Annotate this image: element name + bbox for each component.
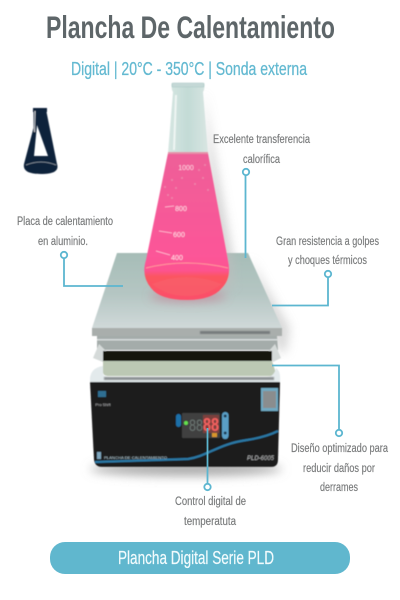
- hot plate product: Pro Shift: [95, 402, 112, 407]
- hot plate product: [90, 253, 290, 476]
- callout: control digital: Control digital de: [175, 496, 246, 508]
- callout: placa de calentamiento: Placa de calentamiento: [17, 216, 113, 228]
- hot plate product: PLANCHA DE CALENTAMIENTO: [104, 456, 167, 460]
- footer banner: [50, 542, 350, 574]
- liquid: [144, 153, 229, 300]
- plate front edge: [92, 328, 282, 336]
- QR code: [261, 388, 278, 411]
- model: PLD-6005: [247, 456, 275, 462]
- dark gap: [103, 351, 272, 361]
- case label: [97, 452, 101, 459]
- shadow: [90, 462, 282, 476]
- blue wave: [95, 431, 278, 462]
- callout: transferencia calorífica: Excelente transferencia: [213, 134, 310, 146]
- black case: [90, 382, 280, 467]
- callout: resistencia a golpes: y choques térmicos: [288, 255, 367, 267]
- callout: placa de calentamiento: en aluminio.: [38, 236, 88, 248]
- flask glass: [168, 83, 208, 153]
- callout: diseño optimizado: [272, 366, 388, 494]
- callout: diseño optimizado: derrames: [320, 482, 358, 494]
- callout: transferencia calorífica: [213, 134, 310, 258]
- plate side shadow: [250, 258, 290, 352]
- plate lower layer: [97, 336, 278, 350]
- case logo: [98, 391, 106, 397]
- buttons: [222, 412, 228, 439]
- callout: control digital: [175, 428, 246, 528]
- flask with pink liquid: 800: [175, 206, 187, 213]
- graduation labels: 1000: [178, 165, 194, 172]
- indicator: [176, 414, 181, 427]
- hot plate product: 88: [203, 415, 219, 435]
- hot plate product: 88: [189, 416, 203, 435]
- footer banner: Plancha Digital Serie PLD: [118, 547, 274, 568]
- flask with pink liquid: 400: [171, 255, 183, 262]
- bubbles: [164, 164, 209, 199]
- callout: placa de calentamiento: [17, 216, 123, 286]
- ceramic insert: [103, 361, 276, 376]
- subtitle: Digital | 20°C - 350°C | Sonda externa: [71, 59, 308, 79]
- flask with pink liquid: 600: [173, 232, 185, 239]
- callout: resistencia a golpes: [272, 236, 379, 306]
- white case top: [90, 366, 280, 382]
- flask shadow: [204, 90, 234, 295]
- display: [182, 413, 220, 438]
- upper plate top surface: [92, 253, 282, 328]
- callout: transferencia calorífica: calorífica: [243, 154, 280, 166]
- flask with pink liquid: [144, 83, 234, 302]
- callout: control digital: temperatuta: [184, 516, 237, 528]
- icon: flask: [24, 108, 57, 174]
- callout: diseño optimizado: reducir daños por: [303, 463, 375, 475]
